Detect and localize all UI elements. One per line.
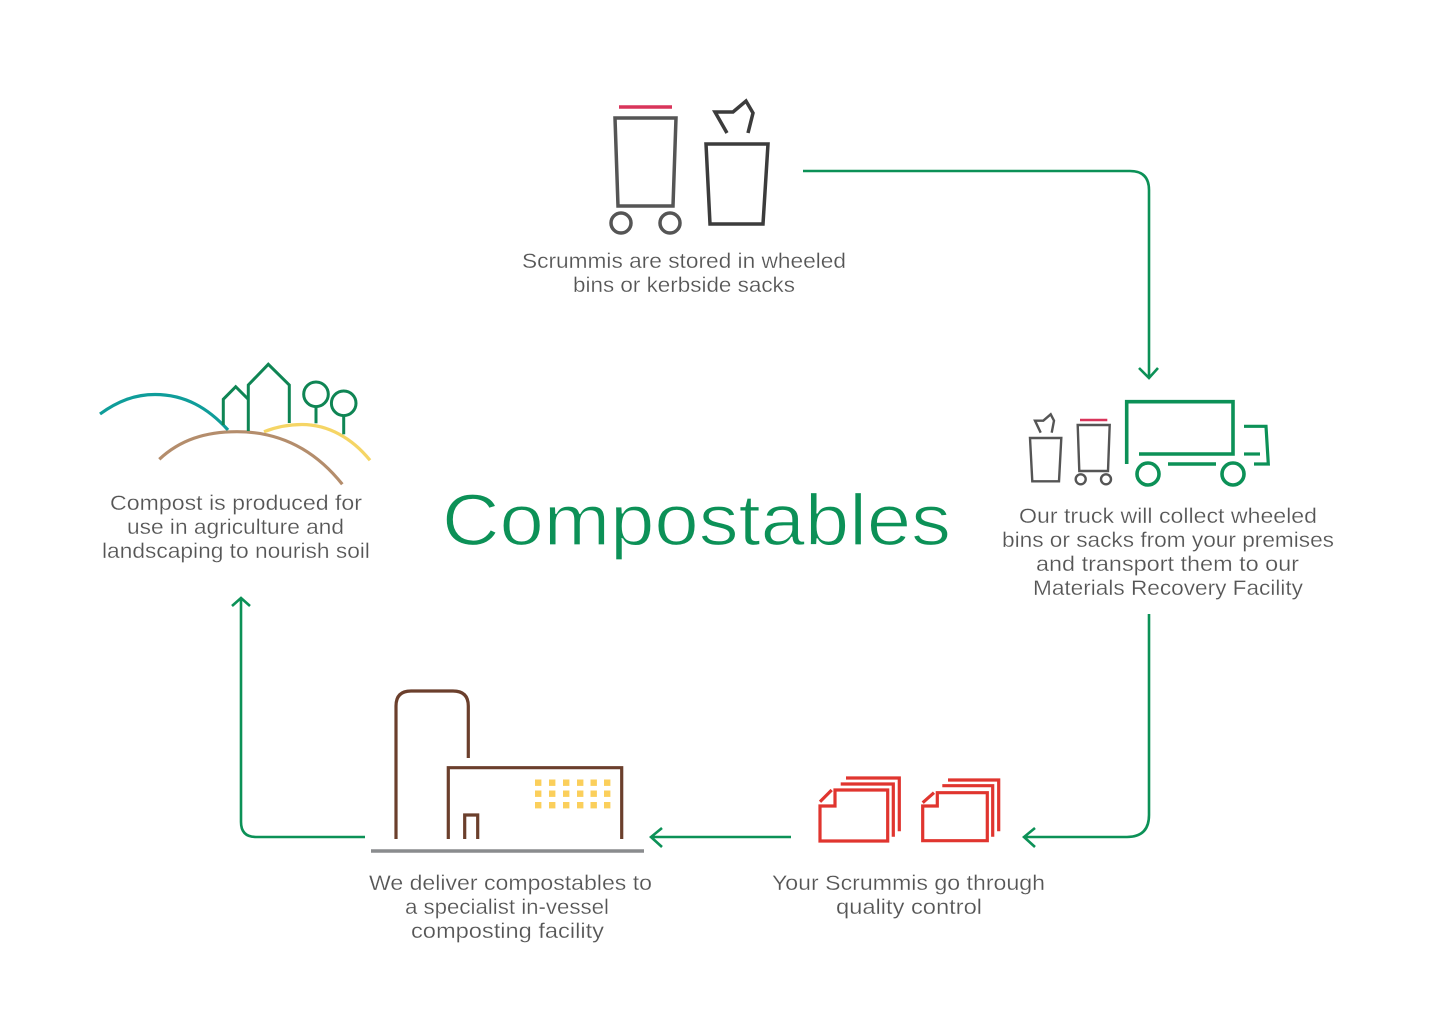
step 5: caption: Compost is produced for (110, 492, 362, 515)
step 2: caption (1002, 505, 1334, 600)
arrow: facility to compost (232, 598, 365, 837)
title: Compostables (442, 481, 951, 561)
step 4: caption (369, 872, 652, 943)
step 4: caption: We deliver compostables to (369, 872, 652, 895)
step 4: caption: a specialist in-vessel (405, 896, 609, 919)
step 5: caption: landscaping to nourish soil (102, 540, 370, 563)
step 4: composting facility icon (371, 691, 644, 851)
step 2: caption: Materials Recovery Facility (1033, 577, 1304, 600)
step 2: caption: Our truck will collect wheeled (1019, 505, 1317, 528)
step 1: caption (522, 250, 846, 297)
step 3: documents icon (820, 778, 999, 841)
step 3: caption (772, 872, 1045, 919)
step 1: caption: bins or kerbside sacks (573, 274, 795, 297)
step 1: caption: Scrummis are stored in wheeled (522, 250, 846, 273)
step 3: caption: Your Scrummis go through (772, 872, 1045, 895)
arrow: quality control to facility (651, 828, 791, 847)
arrow: bins to truck (803, 171, 1158, 378)
step 2: caption: and transport them to our (1036, 553, 1299, 576)
arrow: truck to quality control (1024, 614, 1149, 847)
step 3: caption: quality control (836, 896, 982, 919)
step 1: bins icon (611, 101, 768, 233)
step 5: caption (102, 492, 370, 563)
step 5: landscape icon (100, 364, 370, 484)
step 4: caption: composting facility (411, 920, 605, 943)
step 2: truck icon (1030, 402, 1268, 485)
step 5: caption: use in agriculture and (127, 516, 344, 539)
step 2: caption: bins or sacks from your premises (1002, 529, 1334, 552)
